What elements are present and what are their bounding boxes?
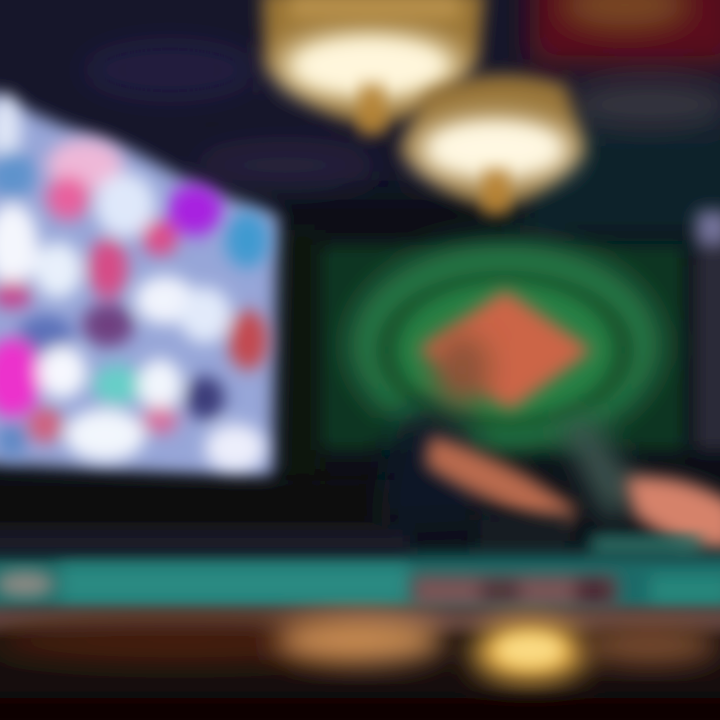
right edge pillar — [695, 210, 720, 450]
torso — [380, 410, 485, 525]
table edge and bottom wood glow — [0, 608, 720, 720]
right arm and hand — [558, 418, 720, 548]
dark floor band below screen — [0, 480, 390, 530]
chips on table — [412, 575, 617, 607]
head — [434, 334, 490, 406]
arm — [425, 435, 578, 530]
croupier figure — [380, 334, 578, 555]
orange diamond emblem — [418, 290, 592, 410]
video wall screen — [0, 85, 278, 480]
gaming table: teal felt — [0, 530, 720, 615]
chandelier: upper left lamp — [262, 0, 485, 133]
red ceiling accent — [530, 0, 720, 129]
lower body shadow — [475, 515, 570, 555]
chandelier: lower right lamp — [400, 75, 585, 212]
green wall panel — [320, 243, 685, 450]
